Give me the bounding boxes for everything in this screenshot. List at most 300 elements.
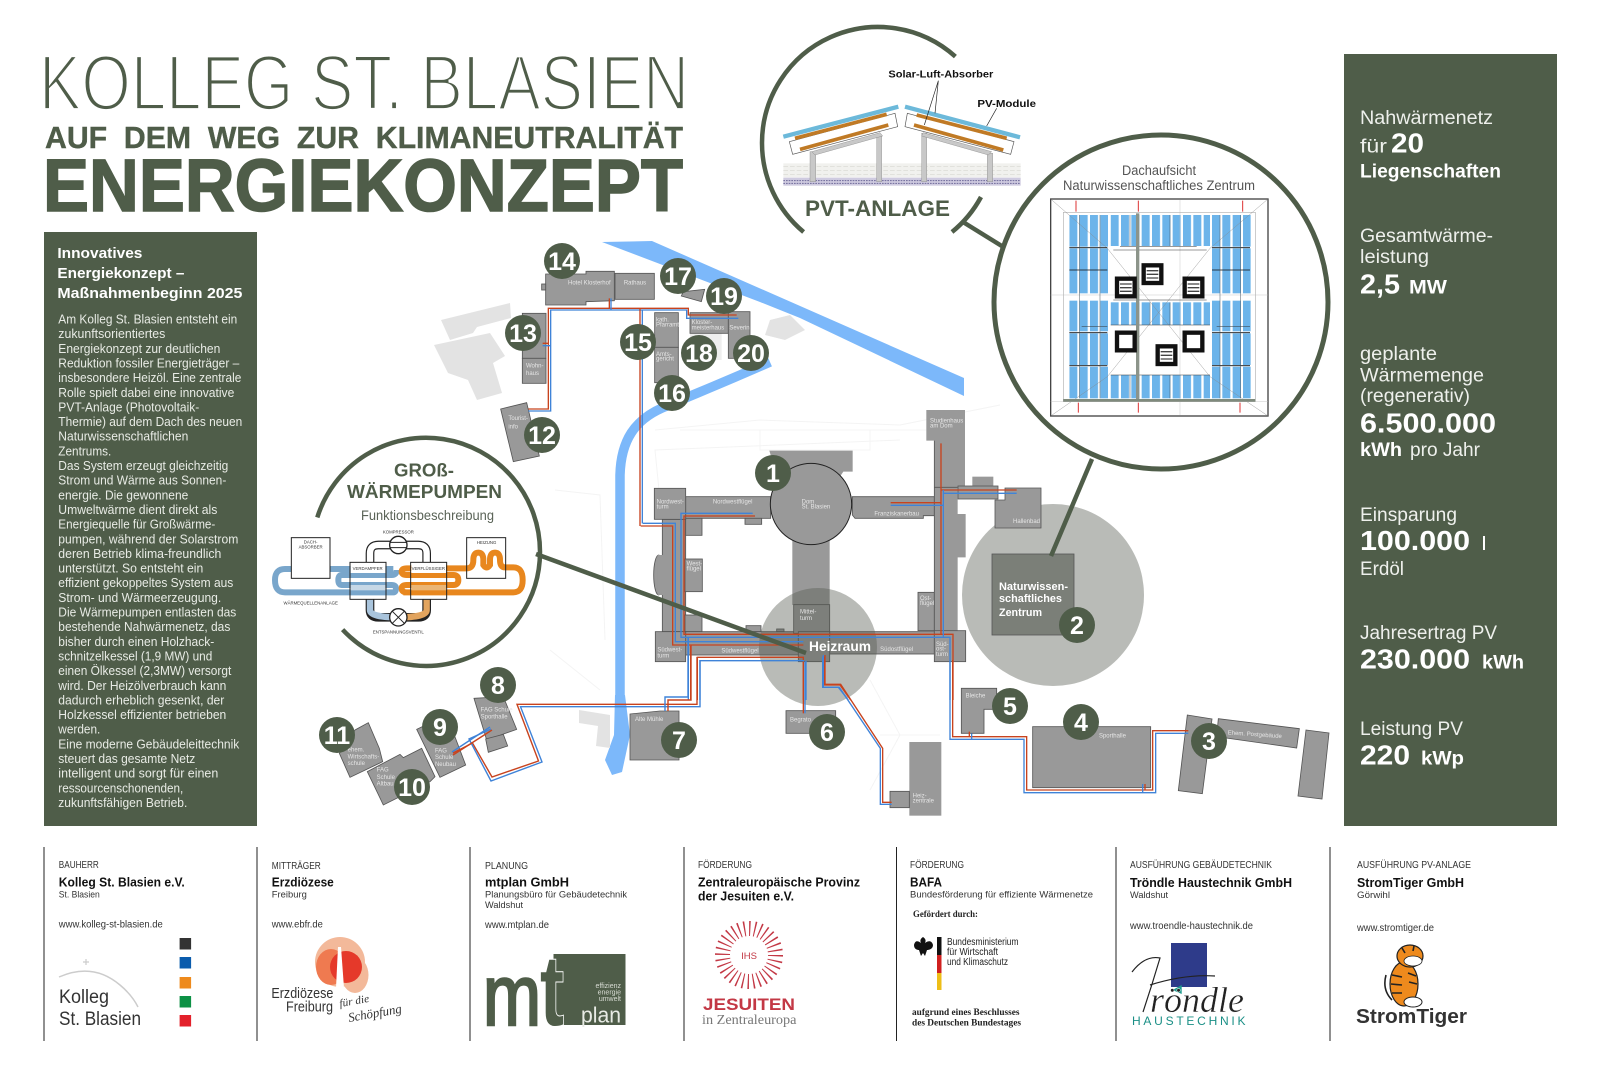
logo: federal eagle and ministry: Bundesministerium bbox=[947, 937, 1018, 948]
figure: total heat output: MW bbox=[1409, 278, 1447, 299]
roof plan heading: Naturwissenschaftliches Zentrum bbox=[1063, 178, 1255, 193]
wing labels: ost- bbox=[936, 647, 946, 653]
wing labels: Studienhaus bbox=[930, 419, 963, 425]
panel body text: Das System erzeugt gleichzeitig bbox=[58, 459, 228, 473]
panel: key figures bbox=[1344, 54, 1557, 826]
divider lines bbox=[44, 847, 1330, 1041]
heating box: HEIZUNG bbox=[477, 540, 497, 545]
partner: BAFA bbox=[910, 859, 1093, 1029]
logo: Tröndle: röndle bbox=[1150, 980, 1244, 1020]
expansion valve bbox=[390, 609, 407, 626]
marker 16 bbox=[654, 375, 690, 411]
figure: PV power: kWp bbox=[1421, 748, 1464, 770]
figure: PV power: Leistung PV bbox=[1360, 719, 1463, 740]
marker 3 bbox=[1191, 723, 1227, 759]
panel body text: Holzkessel effizienter betrieben bbox=[58, 708, 226, 722]
figure: annual PV yield bbox=[1360, 623, 1524, 675]
marker 7: 7 bbox=[672, 727, 686, 755]
building: Alte Mühle: Alte Mühle bbox=[635, 717, 664, 723]
wing labels: flügel bbox=[920, 601, 934, 607]
partner: Tröndle bbox=[1129, 859, 1292, 1028]
panel body text: unterstützt. So entsteht ein bbox=[58, 562, 203, 576]
river bbox=[602, 241, 964, 775]
buildings: south-west school group: FAG bbox=[377, 768, 389, 774]
marker 2: 2 bbox=[1070, 612, 1084, 640]
panel body text: einen Ölkessel (2,3MW) versorgt bbox=[58, 664, 232, 678]
figure: PV power bbox=[1360, 719, 1464, 770]
plan lines bbox=[1051, 199, 1268, 416]
heat pump diagram bbox=[275, 529, 523, 634]
figure: planned heat quantity: Wärmemenge bbox=[1360, 366, 1484, 386]
panel body text: PVT-Anlage (Photovoltaik- bbox=[58, 400, 199, 414]
solar panel rows bbox=[1069, 215, 1251, 398]
panel body text: bisher durch einen Holzhack- bbox=[58, 635, 214, 649]
diagram captions: ENTSPANNUNGSVENTIL bbox=[373, 629, 424, 634]
wing labels: Nordwestflügel bbox=[713, 500, 752, 506]
building: Hallenbad: Hallenbad bbox=[1013, 519, 1040, 525]
absorber box bbox=[291, 538, 330, 578]
logo: Erzdiözese: Freiburg bbox=[286, 999, 333, 1016]
partner: BAFA: BAFA bbox=[910, 876, 942, 890]
buildings: south-east group: zentrale bbox=[913, 799, 935, 805]
wing labels: Ost- bbox=[920, 596, 931, 602]
marker 5 bbox=[992, 688, 1028, 724]
marker 6: 6 bbox=[820, 719, 834, 747]
callout: PVT-Anlage bbox=[762, 27, 1036, 232]
partner: BAFA: FÖRDERUNG bbox=[910, 859, 964, 871]
heading: Energiekonzept: ENERGIEKONZEPT bbox=[43, 144, 683, 227]
marker 1 bbox=[755, 455, 791, 491]
highlight: Naturwissenschaftliches Zentrum: schaftliches bbox=[999, 593, 1062, 605]
partner: Kolleg St. Blasien: St. Blasien bbox=[59, 890, 100, 901]
partner: Erzdiözese Freiburg: www.ebfr.de bbox=[271, 920, 323, 931]
logo: StromTiger tiger: StromTiger bbox=[1356, 1006, 1467, 1028]
building: Alte Mühle bbox=[630, 711, 679, 760]
figure: heating network: Liegenschaften bbox=[1360, 162, 1501, 182]
marker 17: 17 bbox=[664, 263, 692, 291]
panel: description text bbox=[44, 232, 257, 826]
buildings: south-east group: Sporthalle bbox=[1099, 734, 1127, 740]
wing labels: Nordwest- bbox=[657, 499, 684, 505]
diagram captions: WÄRMEQUELLENANLAGE bbox=[283, 600, 338, 605]
wing labels: Franziskanerbau bbox=[874, 512, 919, 518]
callout: Großwärmepumpen bbox=[275, 438, 540, 666]
leader lines bbox=[924, 81, 997, 126]
marker 11 bbox=[319, 717, 355, 753]
callout subheading: Funktionsbeschreibung bbox=[361, 507, 494, 523]
buildings: north group: Hotel Klosterhof bbox=[568, 280, 611, 286]
logo: mtplan: effizienz bbox=[595, 983, 621, 990]
logo: Kolleg St. Blasien bbox=[59, 959, 141, 1030]
label: Dom St. Blasien: St. Blasien bbox=[802, 505, 830, 511]
partner: Tröndle: www.troendle-haustechnik.de bbox=[1129, 921, 1253, 932]
panel body text: dadurch erheblich gesenkt, der bbox=[58, 693, 224, 707]
callout: roof plan bbox=[994, 135, 1328, 469]
panel body text: werden. bbox=[57, 723, 100, 737]
partner: BAFA: Bundesförderung für effiziente Wärmenetze bbox=[910, 890, 1093, 901]
panel heading: Innovatives bbox=[57, 245, 142, 262]
figure: total heat output: Gesamtwärme- bbox=[1360, 226, 1493, 247]
buildings: south-west school group: FAG Schule bbox=[481, 708, 513, 714]
diagram captions bbox=[283, 529, 424, 634]
buildings: north group: Kloster- bbox=[692, 320, 712, 326]
left roof module bbox=[783, 107, 898, 182]
figure: heating network: Nahwärmenetz bbox=[1360, 108, 1493, 129]
partner: Tröndle: Tröndle Haustechnik GmbH bbox=[1130, 876, 1292, 890]
wing labels: turm bbox=[936, 652, 948, 658]
marker 13 bbox=[505, 315, 541, 351]
partner: Kolleg St. Blasien: www.kolleg-st-blasien.de bbox=[58, 920, 163, 931]
label: Solar-Luft-Absorber: Solar-Luft-Absorber bbox=[888, 69, 993, 80]
wing labels: turm bbox=[657, 653, 669, 659]
figure: planned heat quantity: pro Jahr bbox=[1410, 440, 1481, 461]
panel body text: wird. Der Heizölverbrauch kann bbox=[57, 679, 226, 693]
logo: mtplan: t bbox=[540, 935, 564, 1047]
highlight: Naturwissenschaftliches Zentrum bbox=[962, 504, 1144, 686]
panel body text: zukunftsorientiertes bbox=[58, 327, 165, 341]
panel body text: intelligent und sorgt für einen bbox=[58, 767, 218, 781]
marker 12: 12 bbox=[528, 422, 556, 450]
partner: Erzdiözese Freiburg: Erzdiözese bbox=[272, 876, 334, 890]
panel body text: Die Wärmepumpen entlasten das bbox=[58, 606, 236, 620]
highlight: Heizraum bbox=[759, 588, 877, 706]
marker 19: 19 bbox=[710, 283, 738, 311]
buildings: north group: Rathaus bbox=[624, 280, 646, 286]
partner: mtplan bbox=[483, 861, 627, 1047]
figure: planned heat quantity: 6.500.000 bbox=[1360, 408, 1496, 438]
logo: Tröndle bbox=[1132, 943, 1246, 1028]
partner: Kolleg St. Blasien bbox=[58, 860, 191, 1030]
panel body text: zukunftsfähigen Betrieb. bbox=[58, 796, 187, 810]
logo: StromTiger tiger bbox=[1356, 945, 1467, 1028]
figure: planned heat quantity: geplante bbox=[1360, 344, 1437, 365]
partner: StromTiger: Görwihl bbox=[1357, 890, 1390, 901]
figure: heating network: für bbox=[1360, 136, 1388, 158]
buildings: south-east group: Bleiche bbox=[966, 694, 986, 700]
buildings: north group: haus bbox=[526, 371, 539, 377]
panel body text: energie. Die gewonnene bbox=[58, 488, 188, 502]
wing labels: Süd- bbox=[936, 642, 949, 648]
buildings: south-west school group: FAG bbox=[435, 748, 447, 754]
heating pipes: south-west network bbox=[452, 637, 700, 781]
partner: Erzdiözese Freiburg bbox=[271, 860, 403, 1025]
figure: savings: 100.000 bbox=[1360, 525, 1470, 556]
circle arcs bbox=[762, 27, 981, 232]
marker 3: 3 bbox=[1202, 728, 1216, 756]
partner: Tröndle: AUSFÜHRUNG GEBÄUDETECHNIK bbox=[1130, 859, 1272, 871]
partner: Tröndle: Waldshut bbox=[1130, 890, 1168, 901]
panel body text bbox=[57, 312, 242, 810]
buildings: south-east group bbox=[786, 688, 1299, 816]
marker 15 bbox=[620, 324, 656, 360]
figure: planned heat quantity bbox=[1360, 344, 1496, 461]
faint roads bbox=[550, 405, 1000, 790]
logo: federal eagle and ministry: aufgrund eines Beschlusses bbox=[912, 1008, 1020, 1018]
condenser: VERFLÜSSIGER bbox=[412, 566, 445, 571]
wing labels: Südwestflügel bbox=[721, 648, 759, 654]
buildings: south-west school group: schule bbox=[348, 761, 366, 767]
skylights bbox=[1117, 265, 1202, 364]
logo: Kolleg St. Blasien: St. Blasien bbox=[59, 1009, 141, 1030]
marker 4 bbox=[1063, 704, 1099, 740]
buildings: south-west school group: Schule bbox=[435, 755, 454, 761]
refrigerant circuit bbox=[370, 545, 427, 617]
panel body text: pumpen, während der Solarstrom bbox=[58, 532, 238, 546]
marker 4: 4 bbox=[1074, 709, 1088, 737]
panel body text: Zentrums. bbox=[58, 444, 111, 458]
marker 19 bbox=[706, 278, 742, 314]
partner: mtplan: Waldshut bbox=[485, 900, 523, 911]
figure: heating network: 20 bbox=[1391, 128, 1424, 158]
wing labels: Südostflügel bbox=[880, 647, 913, 653]
panel heading bbox=[57, 245, 242, 302]
panel body text: Energiekonzept zur deutlichen bbox=[58, 342, 220, 356]
partner: StromTiger: AUSFÜHRUNG PV-ANLAGE bbox=[1357, 859, 1471, 871]
buildings: main campus bbox=[654, 410, 993, 662]
partner: StromTiger bbox=[1356, 859, 1471, 1028]
absorber box: DACH- bbox=[304, 539, 318, 544]
figure: total heat output: 2,5 bbox=[1360, 269, 1400, 300]
colour squares bbox=[180, 938, 191, 1026]
logo: mtplan bbox=[483, 935, 626, 1047]
evaporator: VERDAMPFER bbox=[353, 566, 383, 571]
partner: mtplan: www.mtplan.de bbox=[484, 920, 549, 931]
logo: Erzdiözese: Schöpfung bbox=[347, 1001, 403, 1025]
partner: Kolleg St. Blasien: BAUHERR bbox=[59, 860, 99, 871]
figure: PV power: 220 bbox=[1360, 740, 1410, 770]
panel body text: ressourcenschonenden, bbox=[58, 781, 183, 795]
marker 9: 9 bbox=[433, 714, 447, 742]
buildings: north group: Tourist- bbox=[508, 416, 528, 422]
partner: StromTiger: StromTiger GmbH bbox=[1357, 876, 1464, 890]
callout heading bbox=[347, 460, 502, 502]
panel body text: Am Kolleg St. Blasien entsteht ein bbox=[58, 312, 237, 326]
label: Mittelturm: Mittel- bbox=[800, 610, 816, 616]
heating pipes: south-east network bbox=[803, 655, 1188, 804]
panel body text: Strom- und Wärmeerzeugung. bbox=[58, 591, 221, 605]
panel body text: insbesondere Heizöl. Eine zentrale bbox=[58, 371, 241, 385]
panel heading: Energiekonzept – bbox=[57, 265, 184, 282]
marker 5: 5 bbox=[1003, 693, 1017, 721]
marker 15: 15 bbox=[624, 329, 652, 357]
logo: Jesuiten sunburst bbox=[702, 928, 796, 1027]
panel body text: Reduktion fossiler Energieträger – bbox=[58, 356, 239, 370]
marker 9 bbox=[422, 709, 458, 745]
marker 8: 8 bbox=[491, 672, 505, 700]
wing labels: flügel bbox=[687, 567, 701, 573]
figure: savings: l bbox=[1482, 534, 1486, 555]
buildings: south-west school group: Schule bbox=[377, 775, 396, 781]
partner: Jesuiten: Zentraleuropäische Provinz bbox=[698, 876, 860, 890]
highlight: Naturwissenschaftliches Zentrum: Naturwissen- bbox=[999, 581, 1068, 593]
marker 7 bbox=[661, 722, 697, 758]
partner: Jesuiten: der Jesuiten e.V. bbox=[698, 890, 794, 904]
figure: annual PV yield: kWh bbox=[1482, 653, 1524, 674]
wing labels: am Dom bbox=[930, 424, 953, 430]
subtitle: AUF DEM WEG ZUR KLIMANEUTRALITÄT bbox=[45, 120, 683, 155]
logo: Jesuiten sunburst: JESUITEN bbox=[703, 995, 795, 1014]
arrow: connector PVT to roof plan bbox=[963, 222, 1005, 248]
ground layers bbox=[783, 163, 1021, 186]
partner: Jesuiten: FÖRDERUNG bbox=[698, 859, 752, 871]
figure: heating network bbox=[1360, 108, 1501, 182]
buildings: south-east group: Heiz- bbox=[913, 793, 927, 799]
figure: savings: Einsparung bbox=[1360, 505, 1457, 526]
buildings: south-west school group: ehem. bbox=[348, 748, 365, 754]
highlight: Naturwissenschaftliches Zentrum: Zentrum bbox=[999, 607, 1042, 619]
callout heading: PVT-ANLAGE bbox=[805, 196, 950, 221]
numbered markers bbox=[319, 243, 1227, 805]
buildings: south-west school group: Sporthalle bbox=[481, 714, 508, 720]
marker 12 bbox=[524, 417, 560, 453]
PVT section drawing bbox=[783, 69, 1036, 186]
highlight: Heizraum: Heizraum bbox=[809, 639, 871, 654]
logo: Jesuiten sunburst: in Zentraleuropa bbox=[702, 1012, 796, 1027]
logo: Jesuiten sunburst: IHS bbox=[741, 951, 757, 962]
drainage markers bbox=[1076, 201, 1243, 413]
buildings: south-west school group: Altbau bbox=[377, 782, 394, 788]
label: Dom St. Blasien: Dom bbox=[802, 499, 814, 505]
buildings: south-west school group bbox=[339, 697, 517, 805]
buildings: north group: Pfarramt bbox=[656, 323, 679, 329]
logo: federal eagle and ministry: des Deutschen Bundestages bbox=[912, 1019, 1021, 1029]
callout heading: GROß- bbox=[394, 460, 454, 480]
arrow: pointer from heat pump callout to Heizraum bbox=[536, 554, 806, 653]
wing labels: Südwest- bbox=[657, 648, 682, 654]
panel heading: Maßnahmenbeginn 2025 bbox=[57, 285, 242, 302]
evaporator bbox=[350, 562, 386, 599]
label: PV-Module: PV-Module bbox=[977, 99, 1036, 110]
compressor bbox=[390, 536, 407, 554]
partner: mtplan: Planungsbüro für Gebäudetechnik bbox=[485, 890, 627, 901]
marker 10 bbox=[394, 769, 430, 805]
partner: BAFA: Gefördert durch: bbox=[913, 910, 978, 920]
marker 2 bbox=[1059, 607, 1095, 643]
title block bbox=[39, 38, 689, 227]
buildings: north group: info bbox=[508, 424, 519, 430]
absorber box: ABSORBER bbox=[299, 544, 323, 549]
partner: Erzdiözese Freiburg: MITTRÄGER bbox=[272, 860, 321, 872]
label: Mittelturm bbox=[800, 610, 816, 622]
marker 17 bbox=[660, 258, 696, 294]
marker 13: 13 bbox=[509, 320, 537, 348]
marker 14: 14 bbox=[548, 248, 576, 276]
callout heading: WÄRMEPUMPEN bbox=[347, 481, 502, 502]
marker 10: 10 bbox=[398, 774, 426, 802]
figure: annual PV yield: Jahresertrag PV bbox=[1360, 623, 1497, 644]
panel body text: effizient gekoppeltes System aus bbox=[58, 576, 233, 590]
buildings: south-west school group: Neubau bbox=[435, 762, 456, 768]
panel body text: bestehende Nahwärmenetz, das bbox=[58, 620, 230, 634]
roof plan heading bbox=[1063, 163, 1255, 193]
light grey neighbouring buildings bbox=[434, 303, 805, 748]
marker 18: 18 bbox=[685, 340, 713, 368]
heating box bbox=[467, 538, 506, 578]
panel body text: Thermie) auf dem Dach des neuen bbox=[58, 415, 242, 429]
panel body text: deren Betrieb klima-freundlich bbox=[58, 547, 221, 561]
figure: annual PV yield: 230.000 bbox=[1360, 644, 1470, 675]
wing labels: West- bbox=[687, 562, 702, 568]
heating pipes: north network bbox=[528, 298, 738, 526]
buildings: north group: kath. bbox=[656, 318, 669, 324]
marker 20 bbox=[733, 335, 769, 371]
buildings: south-east group: Ehem. Postgebäude bbox=[1228, 730, 1283, 740]
logo: Erzdiözese: für die bbox=[338, 993, 370, 1010]
figure: planned heat quantity: kWh bbox=[1360, 440, 1402, 461]
logo: mtplan: energie bbox=[598, 990, 621, 996]
partner: mtplan: PLANUNG bbox=[485, 861, 528, 872]
logo: Erzdiözese: Erzdiözese bbox=[271, 985, 333, 1002]
panel body text: Umweltwärme dient direkt als bbox=[58, 503, 217, 517]
marker 6 bbox=[809, 714, 845, 750]
marker 20: 20 bbox=[737, 340, 765, 368]
diagram captions: KOMPRESSOR bbox=[383, 529, 414, 534]
figure: savings bbox=[1360, 505, 1486, 580]
condenser bbox=[411, 562, 447, 599]
logo: federal eagle and ministry: und Klimaschutz bbox=[947, 957, 1008, 968]
marker 18 bbox=[681, 335, 717, 371]
buildings: north group: Amts- bbox=[656, 352, 672, 358]
building: Hallenbad bbox=[958, 486, 1041, 528]
marker 1: 1 bbox=[766, 460, 780, 488]
heating pipes: main campus bbox=[641, 443, 1017, 700]
wing labels: turm bbox=[657, 504, 669, 510]
figure: savings: Erdöl bbox=[1360, 559, 1404, 580]
buildings: north group bbox=[501, 271, 750, 462]
site map bbox=[319, 241, 1329, 816]
buildings: north group: gericht bbox=[656, 357, 674, 363]
roof plan drawing bbox=[1051, 199, 1268, 416]
partner: Erzdiözese Freiburg: Freiburg bbox=[272, 890, 307, 901]
marker 11: 11 bbox=[324, 722, 350, 750]
logo: federal eagle and ministry: für Wirtschaft bbox=[947, 947, 998, 958]
logo: mtplan: umwelt bbox=[599, 996, 621, 1003]
marker 16: 16 bbox=[658, 380, 686, 408]
title: Kolleg St. Blasien: KOLLEG ST. BLASIEN bbox=[39, 38, 689, 126]
figure: total heat output: leistung bbox=[1360, 247, 1429, 268]
footer: project partners bbox=[44, 847, 1471, 1047]
label: Dom St. Blasien bbox=[802, 499, 830, 511]
panel body text: Eine moderne Gebäudeleittechnik bbox=[58, 737, 240, 751]
buildings: north group: Severin bbox=[729, 325, 750, 331]
partner: StromTiger: www.stromtiger.de bbox=[1356, 923, 1434, 934]
buildings: north group: Wohn- bbox=[526, 363, 544, 369]
building: far-right annex bbox=[1298, 730, 1329, 799]
logo: mtplan: m bbox=[483, 948, 541, 1044]
panel body text: Naturwissenschaftlichen bbox=[58, 430, 188, 444]
wing labels bbox=[657, 419, 963, 659]
panel body text: Strom und Wärme aus Sonnen- bbox=[58, 474, 226, 488]
partner: Kolleg St. Blasien: Kolleg St. Blasien e.V. bbox=[59, 876, 185, 890]
marker 8 bbox=[480, 667, 516, 703]
marker 14 bbox=[544, 243, 580, 279]
arrow: connector roof plan to science centre bbox=[1051, 459, 1092, 556]
circle arc bbox=[317, 438, 540, 666]
figure: planned heat quantity: (regenerativ) bbox=[1360, 386, 1470, 407]
right roof module bbox=[905, 107, 1020, 182]
logo: federal eagle and ministry bbox=[912, 937, 1021, 1029]
buildings: north group: meisterhaus bbox=[692, 325, 724, 331]
figure: total heat output bbox=[1360, 226, 1493, 300]
logo: Tröndle: HAUSTECHNIK bbox=[1132, 1014, 1246, 1028]
roof plan heading: Dachaufsicht bbox=[1122, 163, 1196, 178]
panel body text: Rolle spielt dabei eine innovative bbox=[58, 386, 234, 400]
buildings: south-east group: Begrato bbox=[790, 717, 812, 723]
logo: Erzdiözese bbox=[271, 937, 403, 1025]
partner: mtplan: mtplan GmbH bbox=[485, 876, 569, 890]
partner: Jesuiten bbox=[698, 859, 860, 1027]
logo: mtplan: plan bbox=[581, 1003, 621, 1028]
